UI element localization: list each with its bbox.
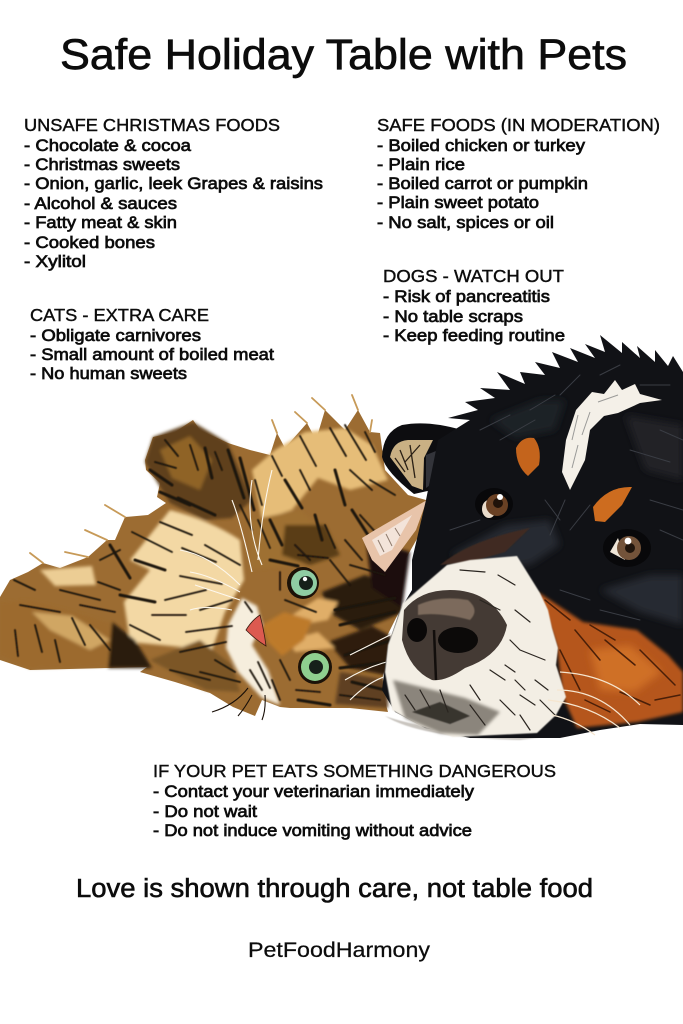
panel: unsafe christmas foods: - Fatty meat & skin	[24, 213, 177, 232]
dog nose	[402, 590, 507, 680]
panel: if your pet eats something dangerous: - Contact your veterinarian immediately	[153, 782, 475, 801]
panel: cats extra care: - Obligate carnivores	[30, 326, 201, 345]
dog tan brow left	[516, 438, 540, 476]
illustration: cat	[0, 395, 427, 720]
cat eye lower	[298, 650, 332, 684]
cat dark head patches	[322, 575, 404, 630]
panel: dogs watch out	[383, 266, 565, 345]
illustration: dog	[382, 335, 683, 740]
panel: cats extra care: CATS - EXTRA CARE	[30, 305, 209, 325]
panel: safe foods: - No salt, spices or oil	[377, 213, 554, 232]
panel: unsafe christmas foods: - Alcohol & sauces	[24, 194, 177, 213]
dog inner ear hair	[395, 445, 420, 478]
cat muzzle	[226, 598, 280, 705]
cat dark whiskers	[212, 688, 265, 720]
panel: unsafe christmas foods: - Cooked bones	[24, 233, 155, 252]
panel: safe foods: - Plain sweet potato	[377, 193, 539, 212]
panel: if your pet eats something dangerous	[153, 761, 556, 840]
dog ear	[382, 423, 470, 494]
dog eye right	[603, 529, 651, 567]
panel: cats extra care	[30, 305, 274, 383]
dog brown above muzzle	[440, 528, 530, 565]
cat fur strokes	[14, 425, 395, 705]
panel: if your pet eats something dangerous: - Do not wait	[153, 802, 257, 821]
panel: safe foods: - Plain rice	[377, 155, 465, 174]
cat leg colouring	[40, 566, 96, 586]
panel: safe foods: - Boiled chicken or turkey	[377, 136, 586, 155]
dog head silhouette	[382, 335, 683, 738]
dog mouth dark	[412, 702, 470, 724]
dog gray sheen	[450, 400, 683, 625]
brand name: PetFoodHarmony	[248, 939, 431, 962]
cat cream chest fur	[124, 510, 244, 650]
dog inner ear	[390, 440, 433, 490]
cat nose	[246, 615, 266, 646]
cat ear	[362, 500, 427, 572]
panel: cats extra care: - No human sweets	[30, 364, 187, 383]
dog orange cheek	[538, 592, 683, 728]
panel: safe foods: SAFE FOODS (IN MODERATION)	[377, 115, 660, 135]
tagline: Love is shown through care, not table food	[76, 875, 593, 903]
dog eye left	[475, 488, 513, 520]
cat raised paw colouring	[145, 422, 252, 520]
dog white muzzle	[385, 556, 566, 737]
panel: unsafe christmas foods: UNSAFE CHRISTMAS FOODS	[24, 115, 280, 135]
cat body silhouette	[0, 410, 426, 716]
dog floor shadow	[385, 716, 600, 740]
panel: unsafe christmas foods	[24, 115, 323, 271]
panel: unsafe christmas foods: - Xylitol	[24, 252, 86, 271]
dog black fur strokes	[450, 365, 683, 620]
panel: dogs watch out: - Risk of pancreatitis	[383, 287, 550, 306]
panel: dogs watch out: - No table scraps	[383, 307, 523, 326]
cat upper back fur	[252, 428, 388, 520]
dog whiskers	[548, 672, 640, 735]
title: Safe Holiday Table with Pets	[60, 31, 627, 79]
cat white whiskers	[180, 470, 400, 700]
panel: safe foods	[377, 115, 660, 232]
panel: if your pet eats something dangerous: IF YOUR PET EATS SOMETHING DANGEROUS	[153, 761, 556, 781]
cat eye upper	[287, 567, 319, 599]
cat fur tufts	[30, 395, 372, 563]
panel: cats extra care: - Small amount of boiled meat	[30, 345, 274, 364]
dog tan brow right	[593, 487, 632, 522]
panel: safe foods: - Boiled carrot or pumpkin	[377, 174, 588, 193]
panel: dogs watch out: - Keep feeding routine	[383, 326, 565, 345]
dog muzzle lower shade	[393, 680, 500, 735]
panel: unsafe christmas foods: - Christmas sweets	[24, 155, 180, 174]
panel: dogs watch out: DOGS - WATCH OUT	[383, 266, 564, 286]
panel: unsafe christmas foods: - Chocolate & cocoa	[24, 136, 192, 155]
dog white blaze	[562, 380, 662, 490]
panel: if your pet eats something dangerous: - Do not induce vomiting without advice	[153, 821, 472, 840]
panel: unsafe christmas foods: - Onion, garlic, leek Grapes & raisins	[24, 174, 323, 193]
dog muzzle hair strokes	[405, 570, 555, 730]
